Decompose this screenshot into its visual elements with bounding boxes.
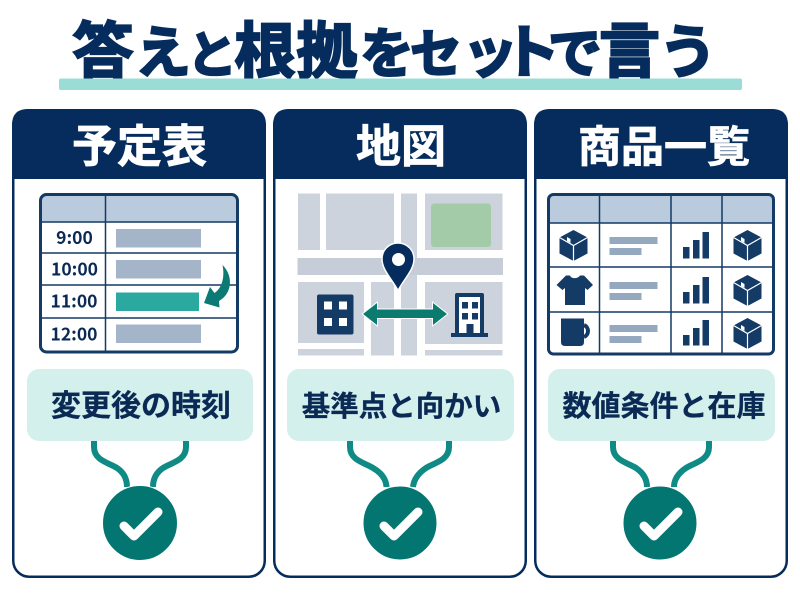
icon: mug <box>561 318 588 346</box>
time labels: 10:00 <box>51 256 98 282</box>
product table <box>548 194 774 354</box>
schedule bars <box>116 229 201 343</box>
panel: 予定表 <box>12 109 266 577</box>
icon: right building <box>451 293 488 337</box>
icon: double arrow <box>363 303 447 325</box>
panel header: 予定表 <box>12 109 266 179</box>
label: 数値条件と在庫: 数値条件と在庫 <box>562 390 766 423</box>
label: 数値条件と在庫 <box>548 369 775 441</box>
bar icons <box>683 232 709 346</box>
connectors <box>350 441 449 487</box>
icon: curved arrow <box>204 265 230 308</box>
title: と <box>187 28 237 84</box>
label: 基準点と向かい <box>287 369 514 441</box>
icon: t-shirt <box>556 276 593 305</box>
green park <box>431 204 491 247</box>
heading: 予定表: 予定表 <box>72 121 207 172</box>
heading: 商品一覧: 商品一覧 <box>578 124 750 172</box>
time labels <box>50 225 98 346</box>
label: 変更後の時刻: 変更後の時刻 <box>51 390 231 423</box>
time labels: 9:00 <box>56 225 93 250</box>
title: ッ <box>462 22 518 84</box>
title: を <box>360 24 414 84</box>
label: 変更後の時刻 <box>27 369 253 441</box>
title: セ <box>410 26 462 84</box>
text lines <box>610 237 658 343</box>
panel header: 商品一覧 <box>534 109 788 179</box>
title: 根 <box>234 18 296 86</box>
icon: check <box>623 486 697 560</box>
panel header: 地図 <box>273 109 527 179</box>
time labels: 11:00 <box>50 288 98 314</box>
title: ト <box>502 20 560 86</box>
title underline <box>59 78 742 90</box>
panel: 地図 <box>273 109 527 577</box>
stock box icons <box>734 230 762 349</box>
connectors <box>94 441 186 487</box>
title: 拠 <box>296 18 358 86</box>
title: え <box>135 22 191 84</box>
icon: check <box>363 486 437 560</box>
schedule table <box>40 194 238 352</box>
map <box>298 194 503 356</box>
icon: map pin <box>382 243 414 290</box>
icon: left building <box>317 294 354 334</box>
icon: check <box>102 486 178 560</box>
icon: box product <box>560 230 588 261</box>
title: う <box>659 20 717 86</box>
panel: 商品一覧 <box>534 109 788 577</box>
title: で <box>548 24 602 84</box>
heading: 地図: 地図 <box>356 121 446 172</box>
connectors <box>613 441 709 487</box>
title: 言 <box>599 18 660 86</box>
title: 答 <box>72 18 134 86</box>
time labels: 12:00 <box>50 322 98 346</box>
label: 基準点と向かい: 基準点と向かい <box>302 391 501 423</box>
